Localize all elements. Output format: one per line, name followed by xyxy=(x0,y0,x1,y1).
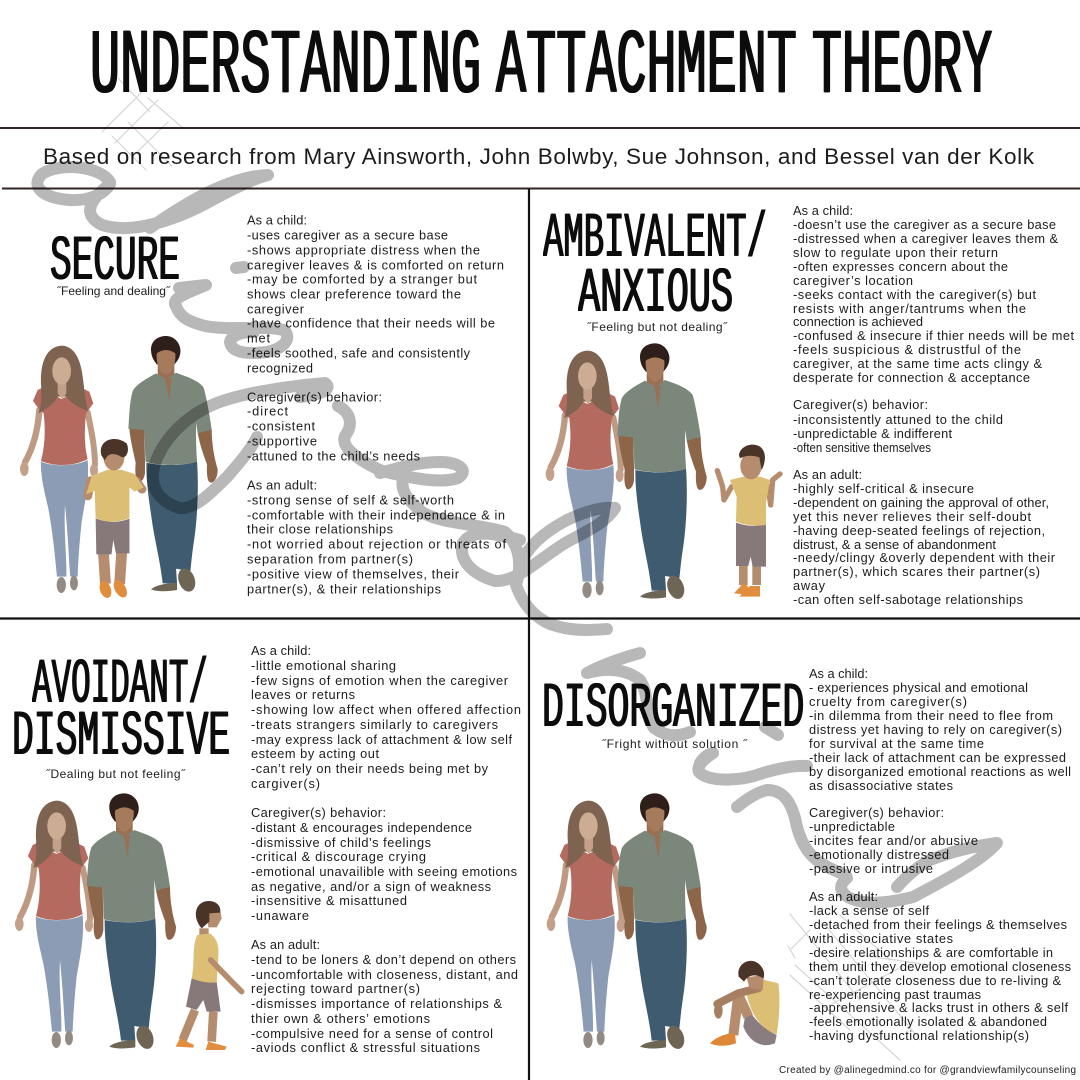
text: disorganized traits: distress yet having to rely on caregiver(s) xyxy=(809,722,1062,737)
heading: ambivalent / anxious xyxy=(543,208,783,329)
text: ambivalent traits: -feels suspicious & distrustful of the xyxy=(793,342,1021,357)
subtitle: Based on research from Mary Ainsworth, John Bolwby, Sue Johnson, and Bessel van der Kolk xyxy=(43,144,1035,169)
text: avoidant traits: -distant & encourages independence xyxy=(251,820,472,835)
text: ambivalent traits: -doesn’t use the caregiver as a secure base xyxy=(793,217,1056,232)
family illustration: secure xyxy=(20,336,218,600)
text: avoidant traits: -may express lack of attachment & low self xyxy=(251,732,512,747)
text: avoidant traits: Caregiver(s) behavior: xyxy=(251,805,386,820)
text: avoidant traits: esteem by acting out xyxy=(251,746,379,761)
text: disorganized traits: -feels emotionally isolated & abandoned xyxy=(809,1014,1047,1029)
text: ambivalent traits: -needy/clingy &overly dependent with their xyxy=(793,550,1056,565)
text: secure traits: -comfortable with their independence & in xyxy=(247,508,505,522)
text: ambivalent traits: -confused & insecure if thier needs will be met xyxy=(793,328,1074,343)
text: disorganized traits: with dissociative states xyxy=(808,931,953,946)
text: ambivalent traits: -dependent on gaining the approval of other, xyxy=(793,495,1049,510)
panel: disorganized xyxy=(542,666,1071,1051)
family illustration: ambivalent xyxy=(546,343,780,601)
text: avoidant traits: -showing low affect when offered affection xyxy=(251,702,521,717)
family illustration: avoidant xyxy=(15,793,242,1051)
text: secure traits: -have confidence that their needs will be xyxy=(247,316,495,330)
text: ambivalent traits: desperate for connection & acceptance xyxy=(793,370,1030,385)
text: ambivalent traits: slow to regulate upon their return xyxy=(793,245,998,260)
text: avoidant traits: -dismissive of child’s feelings xyxy=(251,835,431,850)
text: ambivalent traits: -often sensitive themselves xyxy=(793,440,931,455)
text: avoidant traits: -few signs of emotion when the caregiver xyxy=(251,673,509,688)
text: avoidant traits: -uncomfortable with closeness, distant, and xyxy=(251,967,518,982)
text: avoidant traits: -little emotional sharing xyxy=(251,658,396,673)
text: ambivalent traits xyxy=(793,203,1074,607)
text: disorganized traits: As an adult: xyxy=(809,889,878,904)
text: disorganized traits: -lack a sense of self xyxy=(809,903,929,918)
text: disorganized traits: -desire relationships & are comfortable in xyxy=(809,945,1053,960)
text: disorganized traits: -incites fear and/or abusive xyxy=(809,833,978,848)
text: secure traits: Caregiver(s) behavior: xyxy=(247,390,382,404)
text: disorganized traits: As a child: xyxy=(809,666,868,681)
text: disorganized traits: - experiences physical and emotional xyxy=(809,680,1028,695)
text: avoidant traits: -unaware xyxy=(251,908,309,923)
text: disorganized traits: them until they develop emotional closeness xyxy=(809,959,1071,974)
text: secure traits: caregiver xyxy=(247,302,305,316)
text: secure traits: partner(s), & their relationships xyxy=(247,582,441,596)
text: avoidant traits: leaves or returns xyxy=(251,687,355,702)
text: ambivalent traits: yet this never relieves their self-doubt xyxy=(793,509,1031,524)
panel: avoidant / dismissive xyxy=(12,643,521,1055)
tagline: ambivalent: ˝Feeling but not dealing˝ xyxy=(587,320,728,334)
panel: secure xyxy=(20,212,506,600)
text: avoidant traits: -tend to be loners & don’t depend on others xyxy=(251,952,516,967)
panel: ambivalent / anxious xyxy=(543,203,1074,607)
credit line: Created by @alinegedmind.co for @grandviewfamilycounseling xyxy=(779,1065,1076,1076)
text: disorganized traits: -emotionally distressed xyxy=(809,847,949,862)
text: secure traits: -feels soothed, safe and consistently xyxy=(247,346,471,360)
text: ambivalent traits: -seeks contact with the caregiver(s) but xyxy=(793,287,1036,302)
text: secure traits: -uses caregiver as a secure base xyxy=(247,228,448,242)
text: disorganized traits: -unpredictable xyxy=(809,819,895,834)
text: secure traits: -direct xyxy=(247,404,288,418)
text: avoidant traits: -critical & discourage crying xyxy=(251,849,426,864)
text: avoidant traits: -can’t rely on their needs being met by xyxy=(251,761,489,776)
text: avoidant traits: As an adult: xyxy=(251,937,320,952)
text: ambivalent traits: away xyxy=(793,578,826,593)
text: ambivalent traits: resists with anger/tantrums when the xyxy=(793,301,1026,316)
text: secure traits: -shows appropriate distress when the xyxy=(247,242,480,258)
text: avoidant traits: rejecting toward partner(s) xyxy=(251,981,420,996)
text: secure traits: -not worried about rejection or threats of xyxy=(247,536,506,552)
text: disorganized traits: -can’t tolerate closeness due to re-living & xyxy=(809,973,1061,988)
text: disorganized traits: -their lack of attachment can be expressed xyxy=(809,750,1066,765)
text: disorganized traits: Caregiver(s) behavior: xyxy=(809,805,944,820)
text: ambivalent traits: -can often self-sabotage relationships xyxy=(793,592,1023,607)
text: avoidant traits: -treats strangers similarly to caregivers xyxy=(251,717,498,732)
text: secure traits: caregiver leaves & is comforted on return xyxy=(247,258,504,272)
text: secure traits: -positive view of themselves, their xyxy=(247,566,460,582)
text: avoidant traits xyxy=(251,643,521,1055)
text: avoidant traits: -emotional unavailible with seeing emotions xyxy=(251,864,517,879)
text: disorganized traits xyxy=(808,666,1071,1043)
text: avoidant traits: -aviods conflict & stressful situations xyxy=(251,1040,480,1055)
text: avoidant traits: As a child: xyxy=(251,643,311,658)
text: ambivalent traits: As a child: xyxy=(793,203,853,218)
text: ambivalent traits: -unpredictable & indifferent xyxy=(793,426,952,441)
tagline: avoidant: ˝Dealing but not feeling˝ xyxy=(46,767,186,781)
text: disorganized traits: re-experiencing past traumas xyxy=(809,987,981,1002)
text: ambivalent traits: As an adult: xyxy=(793,467,862,482)
text: ambivalent traits: distrust, & a sense of abandonment xyxy=(793,537,996,552)
text: disorganized traits: as disassociative states xyxy=(809,778,953,793)
text: disorganized traits: by disorganized emotional reactions as well xyxy=(809,764,1071,779)
text: disorganized traits: -apprehensive & lacks trust in others & self xyxy=(809,1000,1068,1015)
text: avoidant traits: -dismisses importance of relationships & xyxy=(251,996,502,1011)
text: avoidant traits: -insensitive & misattuned xyxy=(251,893,407,908)
text: ambivalent traits: caregiver’s location xyxy=(793,273,913,288)
text: ambivalent traits: -distressed when a caregiver leaves them & xyxy=(793,231,1058,246)
text: disorganized traits: -detached from their feelings & themselves xyxy=(809,917,1067,932)
text: secure traits: recognized xyxy=(247,360,313,376)
text: secure traits: -may be comforted by a stranger but xyxy=(247,272,477,286)
text: secure traits: separation from partner(s) xyxy=(247,552,413,566)
text: secure traits: -attuned to the child’s needs xyxy=(247,448,420,464)
text: secure traits: -strong sense of self & self-worth xyxy=(247,492,454,508)
text: secure traits: -consistent xyxy=(247,418,315,434)
text: ambivalent traits: -highly self-critical & insecure xyxy=(793,481,974,496)
tagline: secure: ˝Feeling and dealing˝ xyxy=(57,284,171,298)
text: secure traits: As an adult: xyxy=(247,478,317,492)
text: disorganized traits: cruelty from caregiver(s) xyxy=(809,694,967,709)
text: avoidant traits: cargiver(s) xyxy=(251,776,320,791)
heading: avoidant / dismissive xyxy=(12,654,242,772)
text: disorganized traits: -passive or intrusive xyxy=(809,861,933,876)
text: disorganized traits: -having dysfunctional relationship(s) xyxy=(809,1028,1029,1043)
text: ambivalent traits: -inconsistently attuned to the child xyxy=(793,412,1003,427)
text: secure traits: -supportive xyxy=(247,434,317,448)
text: ambivalent traits: Caregiver(s) behavior: xyxy=(793,397,928,412)
text: secure traits: shows clear preference toward the xyxy=(247,286,461,302)
family illustration: disorganized xyxy=(547,793,779,1051)
text: secure traits xyxy=(247,212,506,596)
text: secure traits: met xyxy=(247,330,270,346)
text: ambivalent traits: caregiver, at the same time acts clingy & xyxy=(793,356,1042,371)
text: disorganized traits: -in dilemma from their need to flee from xyxy=(809,708,1053,723)
text: avoidant traits: thier own & others’ emotions xyxy=(251,1011,430,1026)
text: ambivalent traits: connection is achieved xyxy=(793,314,923,329)
text: avoidant traits: as negative, and/or a sign of weakness xyxy=(251,879,491,894)
tagline: disorganized: ˝Fright without solution ˝ xyxy=(602,737,748,751)
text: ambivalent traits: partner(s), which scares their partner(s) xyxy=(793,564,1040,579)
text: ambivalent traits: -having deep-seated feelings of rejection, xyxy=(793,523,1045,538)
text: secure traits: As a child: xyxy=(247,212,307,228)
text: ambivalent traits: -often expresses concern about the xyxy=(793,259,1008,274)
text: secure traits: their close relationships xyxy=(247,522,393,536)
text: disorganized traits: for survival at the same time xyxy=(809,736,984,751)
text: avoidant traits: -compulsive need for a sense of control xyxy=(251,1026,493,1041)
